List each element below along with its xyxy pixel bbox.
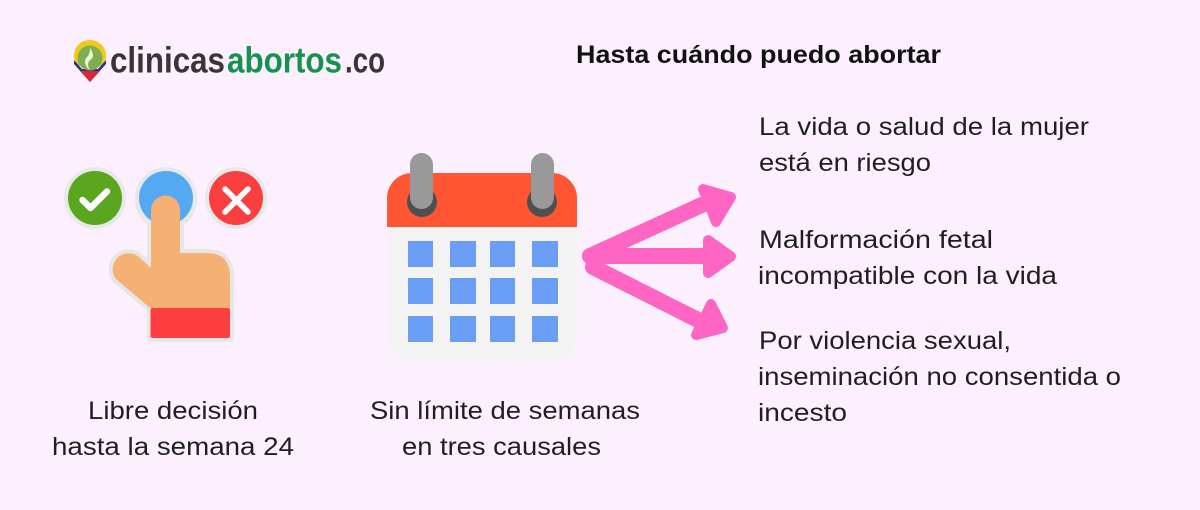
calendar day grid bbox=[408, 241, 558, 342]
arrows: three branches to causes bbox=[590, 189, 731, 335]
icon: red cross button bbox=[205, 167, 267, 229]
icon: hand choosing between options bbox=[64, 167, 267, 342]
cause 3 text bbox=[758, 327, 1121, 427]
label: in three grounds: en tres causales bbox=[402, 433, 601, 461]
cause 2 text: incompatible con la vida bbox=[758, 262, 1057, 290]
arrow: to health risk bbox=[590, 189, 731, 256]
label: up to week 24: hasta la semana 24 bbox=[52, 433, 294, 461]
cause 3 text: Por violencia sexual, bbox=[759, 327, 1011, 355]
title: Hasta cuándo puedo abortar bbox=[576, 41, 941, 69]
icon: map pin logo bbox=[74, 40, 106, 82]
logo wordmark bbox=[110, 40, 385, 80]
hand outline bbox=[113, 196, 234, 342]
icon: calendar bbox=[387, 153, 577, 361]
cause 1 text: está en riesgo bbox=[759, 149, 931, 177]
logo wordmark: abortos bbox=[227, 40, 342, 80]
arrow: to sexual violence bbox=[593, 267, 723, 335]
icon: blue button bbox=[135, 167, 197, 225]
cause 1 text bbox=[759, 113, 1089, 177]
icon: green check button bbox=[64, 167, 126, 229]
label: no week limit: Sin límite de semanas bbox=[370, 397, 640, 425]
logo wordmark: clinicas bbox=[110, 40, 225, 80]
calendar rings bbox=[407, 153, 557, 217]
calendar header bbox=[387, 173, 577, 227]
arrow: to fetal malformation bbox=[590, 240, 731, 273]
cause 3 text: incesto bbox=[758, 399, 847, 427]
logo wordmark: .co bbox=[345, 40, 385, 80]
cause 2 text: Malformación fetal bbox=[759, 226, 993, 254]
calendar body bbox=[387, 173, 577, 361]
logo: clinicasabortos.co bbox=[74, 40, 385, 82]
cause 3 text: inseminación no consentida o bbox=[758, 363, 1121, 391]
label: free decision: Libre decisión bbox=[88, 397, 258, 425]
cause 1 text: La vida o salud de la mujer bbox=[759, 113, 1089, 141]
cause 2 text bbox=[758, 226, 1057, 290]
icon: pointing hand bbox=[113, 196, 230, 338]
